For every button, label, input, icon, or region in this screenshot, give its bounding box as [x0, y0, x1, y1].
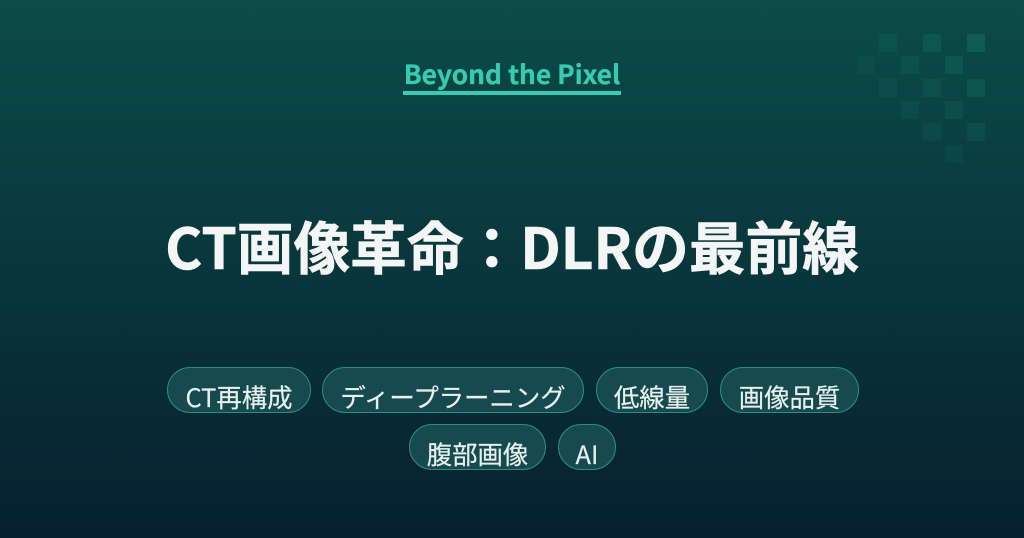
tag: 腹部画像: 腹部画像 [427, 436, 528, 472]
decorative square pattern [879, 34, 985, 141]
tag: ディープラーニング [322, 367, 584, 413]
tag: AI [558, 424, 616, 470]
tag: 腹部画像 [409, 424, 546, 470]
tag: CT再構成: CT再構成 [185, 379, 293, 415]
tag: 画像品質: 画像品質 [739, 379, 840, 415]
tag row 2 [409, 424, 616, 472]
title: CT画像革命：DLRの最前線 [165, 204, 859, 286]
tag: 画像品質 [720, 367, 859, 413]
tag: 低線量 [596, 367, 708, 413]
tag: ディープラーニング: ディープラーニング [340, 379, 566, 415]
brand label: Beyond the Pixel [404, 53, 620, 92]
tag: AI: AI [576, 436, 598, 472]
tag: CT再構成 [167, 367, 311, 413]
tag row 1 [167, 367, 859, 415]
tag: 低線量: 低線量 [614, 379, 690, 415]
